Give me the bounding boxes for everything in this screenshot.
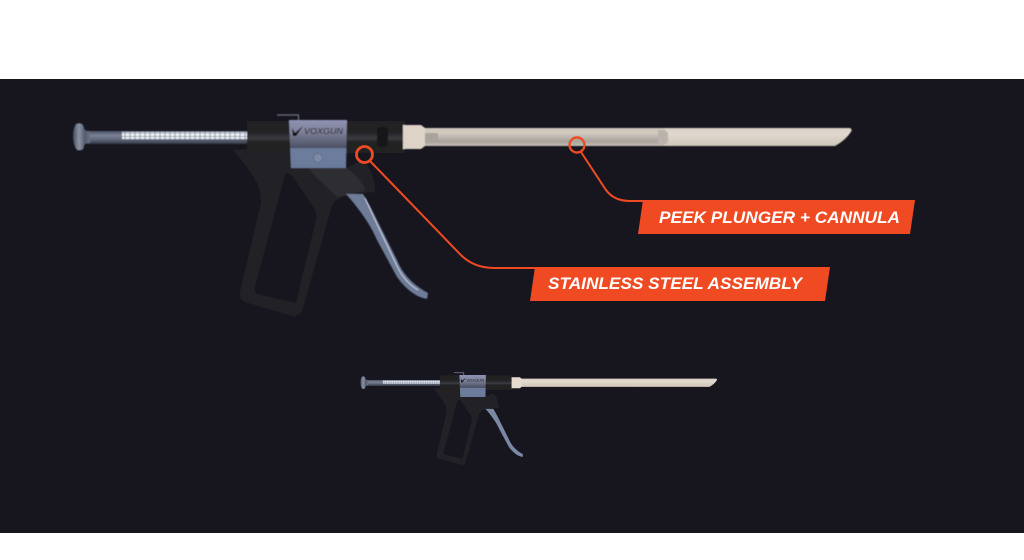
- small plunger rod and knob: [360, 376, 441, 389]
- plunger rod and knob: [73, 123, 249, 150]
- barrel retaining ring: [377, 127, 388, 147]
- small safety clip: [454, 373, 464, 375]
- pistol grip: [233, 149, 375, 316]
- safety clip: [277, 115, 298, 121]
- label: peek plunger + cannula: PEEK PLUNGER + CANNULA: [659, 208, 900, 227]
- small steel plate with logo: [459, 375, 486, 397]
- small device: scaled side view of the voxgun: [360, 373, 717, 465]
- small barrel body: [440, 375, 512, 390]
- small pistol grip: [434, 388, 499, 465]
- lever guard: [308, 168, 365, 197]
- callout leader: stainless steel assembly: [356, 146, 535, 268]
- logo text: VOXGUN: [304, 127, 343, 136]
- barrel body: [247, 121, 405, 153]
- small steel plate with logo: VOXGUN: [466, 378, 484, 382]
- large device: side view of the voxgun: [73, 115, 852, 316]
- callout leader: peek plunger and cannula: [570, 138, 644, 201]
- label: stainless steel assembly: STAINLESS STEEL ASSEMBLY: [548, 274, 804, 293]
- small cannula: [512, 377, 717, 388]
- label: stainless steel assembly: [530, 267, 830, 301]
- label: peek plunger + cannula: [638, 200, 915, 234]
- trigger stainless lever: [346, 194, 428, 299]
- steel plate with logo: [289, 120, 347, 168]
- small trigger lever: [485, 409, 523, 457]
- PEEK cannula: [403, 125, 852, 149]
